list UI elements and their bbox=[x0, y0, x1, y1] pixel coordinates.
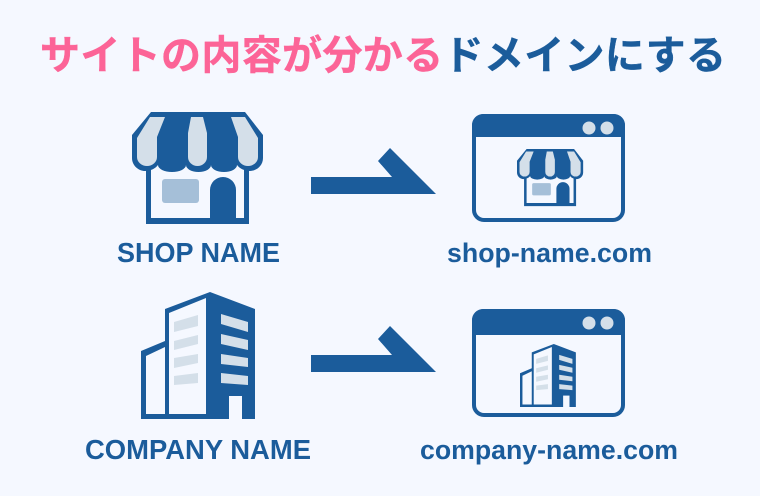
icon: company building bbox=[141, 292, 255, 419]
arrow: company to domain bbox=[311, 326, 436, 372]
icon: shop bbox=[132, 112, 263, 224]
label: company name: COMPANY NAME bbox=[85, 434, 311, 465]
label: company domain: company-name.com bbox=[420, 435, 678, 465]
icon: small shop bbox=[517, 149, 583, 206]
icon: small building bbox=[520, 344, 576, 407]
label: shop name: SHOP NAME bbox=[117, 237, 280, 268]
arrow: shop to domain bbox=[311, 148, 436, 194]
browser window: shop domain bbox=[472, 114, 625, 220]
label: shop domain: shop-name.com bbox=[447, 238, 652, 268]
title: サイトの内容が分かるドメインにする bbox=[40, 34, 726, 78]
browser window: company domain bbox=[472, 309, 625, 415]
